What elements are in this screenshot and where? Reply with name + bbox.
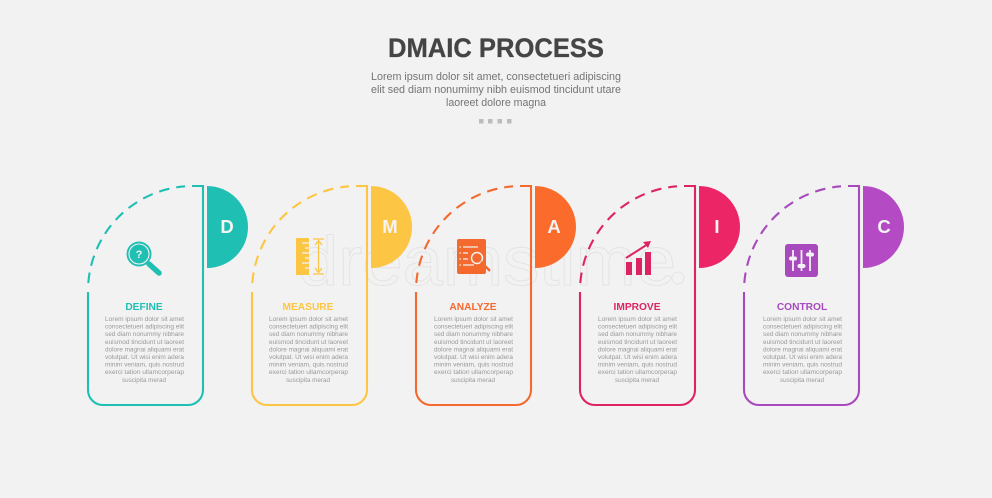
letter: C <box>877 216 891 237</box>
body text: exerci tation ullamcorperap <box>434 369 513 376</box>
body text <box>598 316 677 384</box>
body text: consectetueri adipiscing elit <box>763 324 842 331</box>
body text: euismod tincidunt ut laoreet <box>434 339 513 346</box>
body text: volutpat. Ut wisi enim adera <box>763 354 842 361</box>
panel: analyze <box>416 186 576 405</box>
dashed arc <box>252 186 349 283</box>
body text: suscipita merad <box>780 377 824 384</box>
body text: sed diam nonummy nibhare <box>269 331 348 338</box>
letter tab <box>207 186 248 268</box>
intro text <box>371 71 621 109</box>
heading: MEASURE <box>283 302 334 313</box>
body text: suscipita merad <box>286 377 330 384</box>
body text: Lorem ipsum dolor sit amet <box>434 316 513 323</box>
intro text: elit sed diam nonumimy nibh euismod tincidunt utare <box>371 84 621 96</box>
card outline <box>744 186 859 405</box>
watermark: dreamstime <box>298 222 676 300</box>
body text: consectetueri adipiscing elit <box>598 324 677 331</box>
heading: CONTROL <box>777 302 827 313</box>
body text: sed diam nonummy nibhare <box>598 331 677 338</box>
body text: dolore magnai aliquami erat <box>105 346 184 353</box>
body text: minim veniam, quis nostrud <box>598 362 677 369</box>
panel: control <box>744 186 904 405</box>
body text: exerci tation ullamcorperap <box>763 369 842 376</box>
body text <box>763 316 842 384</box>
body text: exerci tation ullamcorperap <box>598 369 677 376</box>
body text: minim veniam, quis nostrud <box>105 362 184 369</box>
body text <box>269 316 348 384</box>
icon: report with magnifier <box>457 239 490 274</box>
body text: sed diam nonummy nibhare <box>105 331 184 338</box>
body text: euismod tincidunt ut laoreet <box>598 339 677 346</box>
body text: exerci tation ullamcorperap <box>269 369 348 376</box>
card outline <box>88 186 203 405</box>
intro text: Lorem ipsum dolor sit amet, consectetueri adipiscing <box>371 71 621 83</box>
body text: dolore magnai aliquami erat <box>763 346 842 353</box>
body text: minim veniam, quis nostrud <box>269 362 348 369</box>
body text: suscipita merad <box>451 377 495 384</box>
letter tab <box>863 186 904 268</box>
body text <box>434 316 513 384</box>
body text: sed diam nonummy nibhare <box>763 331 842 338</box>
card outline <box>252 186 367 405</box>
body text: volutpat. Ut wisi enim adera <box>598 354 677 361</box>
body text: dolore magnai aliquami erat <box>598 346 677 353</box>
body text: suscipita merad <box>615 377 659 384</box>
body text: euismod tincidunt ut laoreet <box>269 339 348 346</box>
dashed arc <box>744 186 841 283</box>
body text: Lorem ipsum dolor sit amet <box>269 316 348 323</box>
heading: DEFINE <box>125 302 163 313</box>
heading: ANALYZE <box>449 302 497 313</box>
body text: Lorem ipsum dolor sit amet <box>598 316 677 323</box>
letter tab <box>535 186 576 268</box>
letter: A <box>547 216 561 237</box>
letter: D <box>220 216 234 237</box>
body text: minim veniam, quis nostrud <box>763 362 842 369</box>
letter: M <box>382 216 398 237</box>
body text: consectetueri adipiscing elit <box>434 324 513 331</box>
body text: volutpat. Ut wisi enim adera <box>434 354 513 361</box>
body text: consectetueri adipiscing elit <box>269 324 348 331</box>
body text: dolore magnai aliquami erat <box>434 346 513 353</box>
body text: sed diam nonummy nibhare <box>434 331 513 338</box>
body text: consectetueri adipiscing elit <box>105 324 184 331</box>
title: DMAIC PROCESS <box>388 33 604 63</box>
pagination dots <box>479 119 512 124</box>
heading: IMPROVE <box>614 302 661 313</box>
icon: magnifier: ? <box>136 249 143 261</box>
dashed arc <box>88 186 185 283</box>
body text: volutpat. Ut wisi enim adera <box>269 354 348 361</box>
letter: I <box>714 216 720 237</box>
body text: volutpat. Ut wisi enim adera <box>105 354 184 361</box>
body text: exerci tation ullamcorperap <box>105 369 184 376</box>
letter tab <box>371 186 412 268</box>
card outline <box>580 186 695 405</box>
dashed arc <box>416 186 513 283</box>
icon: magnifier <box>126 242 159 273</box>
card outline <box>416 186 531 405</box>
body text <box>105 316 184 384</box>
dashed arc <box>580 186 677 283</box>
body text: suscipita merad <box>122 377 166 384</box>
panel: improve <box>580 186 740 405</box>
icon: sliders <box>785 244 818 277</box>
body text: dolore magnai aliquami erat <box>269 346 348 353</box>
panel: define <box>88 186 248 405</box>
letter tab <box>699 186 740 268</box>
icon: ruler <box>296 238 324 275</box>
icon: rising bar chart <box>626 241 651 275</box>
intro text: laoreet dolore magna <box>446 97 547 109</box>
body text: Lorem ipsum dolor sit amet <box>763 316 842 323</box>
body text: Lorem ipsum dolor sit amet <box>105 316 184 323</box>
body text: euismod tincidunt ut laoreet <box>105 339 184 346</box>
panel: measure <box>252 186 412 405</box>
body text: minim veniam, quis nostrud <box>434 362 513 369</box>
body text: euismod tincidunt ut laoreet <box>763 339 842 346</box>
